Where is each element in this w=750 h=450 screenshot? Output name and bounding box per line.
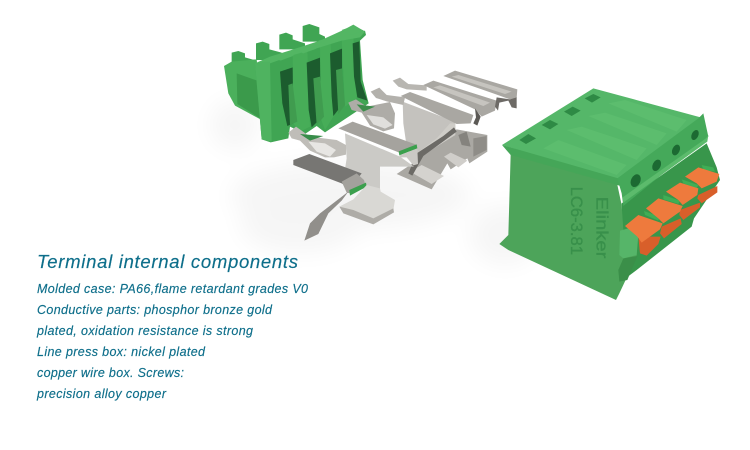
rear U-shaped wire boxes xyxy=(397,129,487,189)
housing rear tabs xyxy=(232,24,325,68)
housing top lugs xyxy=(271,26,364,61)
housing column highlights xyxy=(293,36,357,132)
rear contact top bars xyxy=(401,71,517,176)
soft floor shadows xyxy=(210,100,540,265)
description text block: Molded case: PA66,flame retardant grades V0 xyxy=(37,282,308,296)
left end lug xyxy=(619,228,638,258)
description text block: Line press box: nickel plated xyxy=(37,345,206,359)
description text block: precision alloy copper xyxy=(36,387,167,401)
housing left column xyxy=(255,62,272,142)
connector side face xyxy=(499,154,637,300)
housing plug side xyxy=(224,59,262,120)
housing front face xyxy=(255,31,369,142)
exploded terminal: green housing and metal parts xyxy=(224,24,517,241)
front rail holes xyxy=(629,129,700,189)
embossed brand text: Elinker xyxy=(593,197,612,259)
description text block: plated, oxidation resistance is strong xyxy=(36,324,253,338)
housing cavities xyxy=(280,41,367,127)
front flat blade xyxy=(293,154,362,188)
connector bottom hole xyxy=(618,256,637,282)
front spring tail xyxy=(304,192,348,241)
heading: Terminal internal components xyxy=(37,251,298,272)
connector test holes top xyxy=(519,94,601,144)
connector top face xyxy=(502,88,701,181)
connector front rail xyxy=(617,113,708,206)
front contact finger xyxy=(288,127,346,157)
connector ridges xyxy=(543,100,687,175)
rear contact pads and fingers xyxy=(348,78,427,131)
description text block: Conductive parts: phosphor bronze gold xyxy=(37,303,273,317)
middle contact edge xyxy=(399,144,417,155)
orange push buttons xyxy=(625,165,719,256)
description text block: copper wire box. Screws: xyxy=(37,366,184,380)
middle contact top bar xyxy=(338,122,417,153)
description text block xyxy=(36,282,308,401)
connector lower body xyxy=(622,143,720,280)
cavity inner ribs xyxy=(288,68,345,125)
embossed model text: LC6-3.81 xyxy=(567,187,586,255)
rear contact plate xyxy=(403,102,456,160)
housing ledge xyxy=(255,25,365,63)
front wire box xyxy=(339,185,395,221)
connector top front edge xyxy=(502,145,621,186)
middle contact plate xyxy=(343,133,414,190)
assembled connector xyxy=(499,88,720,300)
